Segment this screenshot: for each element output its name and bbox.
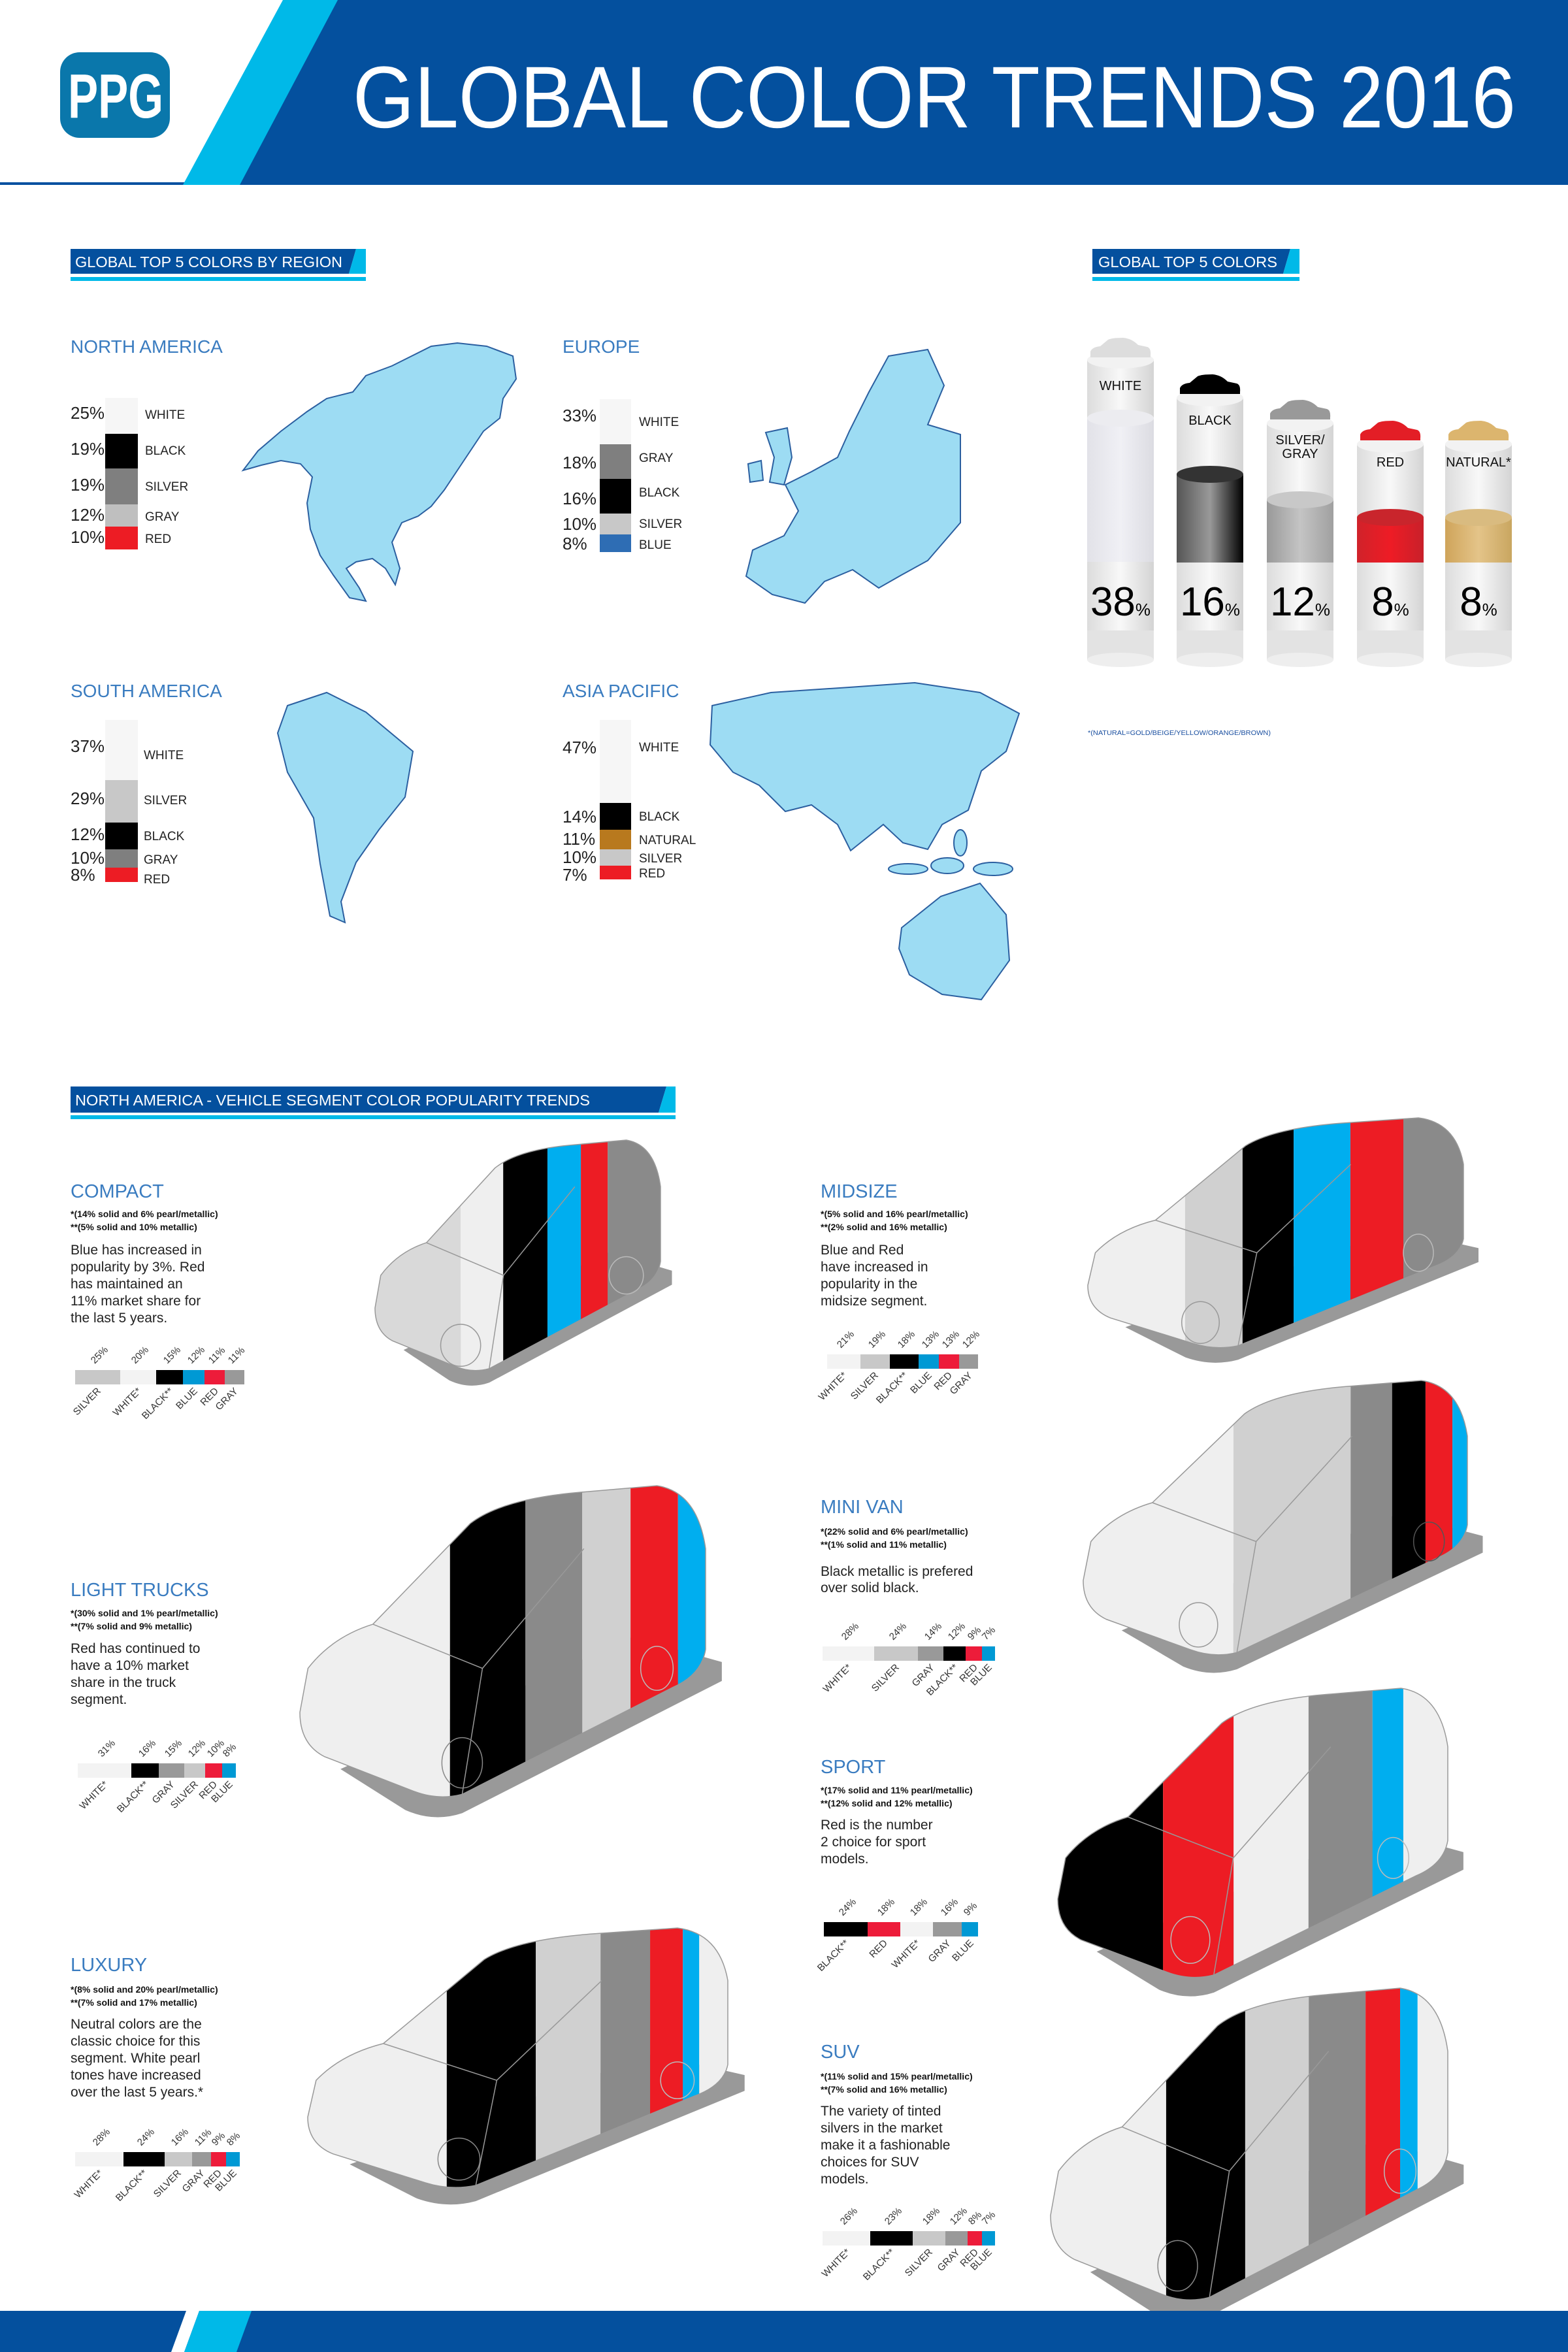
legend: north america: 25% xyxy=(71,403,105,423)
panel: north america: NORTH AMERICA xyxy=(71,336,223,357)
bar chart: light trucks: GRAY xyxy=(150,1779,177,1806)
panel: compact: the last 5 years. xyxy=(71,1311,167,1326)
panel: asia pacific: ASIA PACIFIC xyxy=(563,681,679,701)
legend: europe: 10% xyxy=(563,514,596,534)
legend: asia pacific: 47% xyxy=(563,738,596,757)
cylinder: silver/gray 12%: SILVER/ xyxy=(1275,433,1325,448)
map: north america xyxy=(243,343,516,601)
bar chart: luxury: 24% xyxy=(135,2127,157,2148)
panel: luxury: **(7% solid and 17% metallic) xyxy=(71,1997,197,2008)
bar chart: luxury: 11% xyxy=(193,2127,214,2148)
section heading: global top 5 colors by region xyxy=(71,249,366,281)
panel: luxury: LUXURY xyxy=(71,1955,147,1976)
legend: south america: GRAY xyxy=(144,853,178,867)
panel: midsize: popularity in the xyxy=(821,1277,917,1292)
bar chart: suv: 26% xyxy=(838,2206,860,2227)
panel: midsize: midsize segment. xyxy=(821,1294,927,1309)
panel: mini van: *(22% solid and 6% pearl/metallic) xyxy=(821,1526,968,1537)
bar chart: mini van: 24% xyxy=(887,1621,909,1642)
panel: sport: 2 choice for sport xyxy=(821,1835,926,1850)
bar chart: sport: RED xyxy=(867,1938,890,1960)
panel: mini van xyxy=(821,1497,998,1698)
legend: europe: SILVER xyxy=(639,517,682,531)
bar chart: light trucks: 12% xyxy=(186,1738,208,1759)
bar chart: mini van: 28% xyxy=(840,1621,861,1642)
bar chart: suv: BLUE xyxy=(968,2247,994,2273)
panel: europe: EUROPE xyxy=(563,336,640,357)
bar chart: compact xyxy=(71,1345,247,1422)
panel: south america: SOUTH AMERICA xyxy=(71,681,222,701)
bar chart: luxury: BLACK** xyxy=(114,2168,150,2204)
cylinder: silver/gray 12% xyxy=(1267,400,1333,667)
bar chart: midsize: SILVER xyxy=(849,1370,881,1402)
bar chart: suv: WHITE* xyxy=(820,2247,853,2279)
map: asia pacific xyxy=(710,683,1019,1000)
panel: light trucks: *(30% solid and 1% pearl/metallic) xyxy=(71,1608,218,1618)
panel: midsize xyxy=(817,1181,982,1406)
bar chart: light trucks: 10% xyxy=(205,1738,227,1759)
chart: global top 5 colors cylinders xyxy=(1087,338,1512,667)
panel: suv: make it a fashionable xyxy=(821,2138,950,2153)
panel: sport: Red is the number xyxy=(821,1818,933,1833)
panel: suv: **(7% solid and 16% metallic) xyxy=(821,2084,947,2095)
bar chart: luxury: WHITE* xyxy=(73,2168,105,2200)
car: suv xyxy=(1051,1988,1463,2321)
bar chart: mini van: 14% xyxy=(923,1621,944,1642)
cylinder: black 16% xyxy=(1177,374,1243,667)
panel: light trucks xyxy=(71,1580,238,1815)
panel: midsize: Blue and Red xyxy=(821,1243,904,1258)
legend: north america: 12% xyxy=(71,505,105,525)
panel: compact: popularity by 3%. Red xyxy=(71,1260,204,1275)
bar chart: compact: 11% xyxy=(226,1345,247,1366)
panel: midsize: **(2% solid and 16% metallic) xyxy=(821,1222,947,1232)
bar chart: midsize: 19% xyxy=(866,1329,888,1350)
panel: compact xyxy=(71,1181,247,1422)
legend: north america: 19% xyxy=(71,475,105,495)
bar chart: mini van: WHITE* xyxy=(821,1662,854,1695)
bar chart: compact: 25% xyxy=(89,1345,110,1366)
bar chart: compact: 20% xyxy=(129,1345,151,1366)
panel: suv: choices for SUV xyxy=(821,2155,919,2170)
bar chart: luxury: GRAY xyxy=(180,2168,207,2195)
legend: south america: 8% xyxy=(71,865,95,885)
section heading: global top 5 colors: GLOBAL TOP 5 COLORS xyxy=(1098,253,1277,270)
cylinder: red 8%: 8% xyxy=(1371,580,1409,625)
panel: luxury: segment. White pearl xyxy=(71,2051,200,2066)
bar chart: luxury: 28% xyxy=(91,2127,112,2148)
panel: suv: *(11% solid and 15% pearl/metallic) xyxy=(821,2071,973,2082)
panel: asia pacific xyxy=(563,681,1019,1000)
panel: mini van: over solid black. xyxy=(821,1580,919,1595)
bar chart: sport: BLUE xyxy=(950,1938,976,1964)
section heading: global top 5 colors xyxy=(1092,249,1299,281)
car: luxury xyxy=(308,1928,745,2204)
bar chart: sport: 16% xyxy=(939,1897,960,1918)
bar chart: luxury: SILVER xyxy=(152,2168,184,2200)
legend: south america xyxy=(71,720,187,887)
legend: europe: BLACK xyxy=(639,486,680,500)
bar chart: suv: GRAY xyxy=(936,2247,962,2274)
panel: luxury xyxy=(71,1955,242,2204)
panel: luxury: over the last 5 years.* xyxy=(71,2085,203,2100)
bar chart: suv xyxy=(820,2206,998,2283)
legend: asia pacific: 14% xyxy=(563,807,596,826)
panel: light trucks: **(7% solid and 9% metallic) xyxy=(71,1621,192,1631)
panel: mini van: MINI VAN xyxy=(821,1497,904,1518)
bar chart: light trucks: BLACK** xyxy=(115,1779,151,1815)
cylinder: black 16%: 16% xyxy=(1180,580,1240,625)
panel: suv: SUV xyxy=(821,2042,860,2063)
panel: sport: **(12% solid and 12% metallic) xyxy=(821,1798,953,1808)
bar chart: midsize: BLACK** xyxy=(874,1370,910,1406)
legend: asia pacific: RED xyxy=(639,867,665,881)
bar chart: compact: BLUE xyxy=(174,1386,200,1412)
legend: asia pacific: BLACK xyxy=(639,810,680,824)
bar chart: compact: GRAY xyxy=(214,1386,240,1413)
section heading: vehicle segment trends: NORTH AMERICA - VEHICLE SEGMENT COLOR POPULARITY TRENDS xyxy=(75,1092,590,1109)
bar chart: light trucks: 8% xyxy=(221,1741,238,1759)
bar chart: midsize: RED xyxy=(932,1370,955,1392)
cylinder: silver/gray 12%: GRAY xyxy=(1282,447,1318,461)
panel: light trucks: Red has continued to xyxy=(71,1641,200,1656)
bar chart: mini van: BLUE xyxy=(968,1662,994,1688)
panel: sport: *(17% solid and 11% pearl/metallic) xyxy=(821,1785,973,1795)
panel: luxury: classic choice for this xyxy=(71,2034,200,2049)
cylinder: red 8%: RED xyxy=(1377,455,1404,470)
bar chart: sport: WHITE* xyxy=(890,1938,923,1970)
panel: suv: models. xyxy=(821,2172,869,2187)
bar chart: sport: BLACK** xyxy=(815,1938,851,1974)
bar chart: sport: 18% xyxy=(875,1897,897,1918)
panel: light trucks: share in the truck xyxy=(71,1675,176,1690)
bar chart: mini van: RED xyxy=(957,1662,980,1684)
section heading: global top 5 colors by region: GLOBAL TOP 5 COLORS BY REGION xyxy=(75,253,342,270)
bar chart: compact: WHITE* xyxy=(111,1386,144,1418)
bar chart: midsize: 21% xyxy=(835,1329,857,1350)
bar chart: luxury xyxy=(73,2127,242,2204)
legend: asia pacific: 10% xyxy=(563,847,596,867)
panel: south america xyxy=(71,681,413,923)
bar chart: midsize: 12% xyxy=(960,1329,982,1350)
car: mini van xyxy=(1083,1380,1483,1673)
legend: asia pacific: SILVER xyxy=(639,852,682,866)
bar chart: sport: 18% xyxy=(908,1897,930,1918)
cylinder: black 16%: BLACK xyxy=(1188,414,1232,428)
bar chart: light trucks: 16% xyxy=(137,1738,158,1759)
panel: light trucks: LIGHT TRUCKS xyxy=(71,1580,209,1601)
bar chart: compact: BLACK** xyxy=(140,1386,176,1422)
legend: south america: 37% xyxy=(71,736,105,756)
cylinder: white 38%: WHITE xyxy=(1100,379,1141,393)
panel: compact: 11% market share for xyxy=(71,1294,201,1309)
legend: europe: 33% xyxy=(563,406,596,425)
cylinder: natural 8% xyxy=(1445,421,1512,667)
logo: PPG xyxy=(60,52,170,138)
cylinder: red 8% xyxy=(1357,421,1424,667)
section heading: vehicle segment trends xyxy=(71,1086,676,1119)
panel: compact: has maintained an xyxy=(71,1277,183,1292)
bar chart: light trucks: BLUE xyxy=(209,1779,235,1805)
bar chart: suv: 23% xyxy=(883,2206,904,2227)
bar chart: sport: 9% xyxy=(962,1900,979,1918)
legend: europe: 8% xyxy=(563,534,587,553)
bar chart: mini van: 12% xyxy=(946,1621,968,1642)
bar chart: mini van: SILVER xyxy=(870,1662,902,1694)
bar chart: suv: 18% xyxy=(921,2206,942,2227)
car: compact xyxy=(375,1140,672,1386)
bar chart: compact: SILVER xyxy=(71,1386,103,1418)
bar chart: mini van: 7% xyxy=(980,1624,998,1642)
map: europe xyxy=(746,350,960,603)
legend: asia pacific xyxy=(563,720,696,885)
bar chart: compact: 11% xyxy=(206,1345,227,1366)
bar chart: midsize: 13% xyxy=(940,1329,962,1350)
bar chart: mini van xyxy=(821,1621,998,1698)
legend: south america: WHITE xyxy=(144,749,184,762)
legend: europe: 18% xyxy=(563,453,596,472)
legend: south america: 29% xyxy=(71,789,105,808)
panel: midsize: *(5% solid and 16% pearl/metallic) xyxy=(821,1209,968,1219)
panel: luxury: *(8% solid and 20% pearl/metallic) xyxy=(71,1984,218,1995)
panel: suv: The variety of tinted xyxy=(821,2104,941,2119)
legend: south america: 10% xyxy=(71,848,105,868)
panel: suv xyxy=(820,2042,998,2283)
panel: mini van: **(1% solid and 11% metallic) xyxy=(821,1539,947,1550)
legend: europe xyxy=(563,399,682,553)
bar chart: midsize: 18% xyxy=(896,1329,917,1350)
bar chart: luxury: BLUE xyxy=(213,2168,239,2194)
panel: sport xyxy=(815,1757,979,1974)
cylinder: white 38%: 38% xyxy=(1090,580,1151,625)
panel: suv: silvers in the market xyxy=(821,2121,943,2136)
bar chart: compact: 15% xyxy=(161,1345,183,1366)
bar chart: suv: 7% xyxy=(980,2209,998,2227)
car: midsize xyxy=(1088,1118,1478,1363)
cylinder: silver/gray 12%: 12% xyxy=(1270,580,1330,625)
bar chart: midsize xyxy=(817,1329,982,1406)
panel: light trucks: segment. xyxy=(71,1692,127,1707)
bar chart: light trucks: 31% xyxy=(96,1738,118,1759)
panel: midsize: have increased in xyxy=(821,1260,928,1275)
legend: asia pacific: 11% xyxy=(563,829,595,849)
panel: mini van: Black metallic is prefered xyxy=(821,1564,973,1579)
legend: europe: WHITE xyxy=(639,416,679,429)
legend: north america: RED xyxy=(145,532,171,546)
legend: asia pacific: 7% xyxy=(563,865,587,885)
bar chart: suv: 12% xyxy=(948,2206,970,2227)
legend: europe: 16% xyxy=(563,489,596,508)
panel: europe xyxy=(563,336,960,603)
bar chart: luxury: 16% xyxy=(169,2127,191,2148)
panel: compact: **(5% solid and 10% metallic) xyxy=(71,1222,197,1232)
bar chart: luxury: 8% xyxy=(225,2130,242,2148)
legend: north america: WHITE xyxy=(145,408,185,422)
panel: sport: models. xyxy=(821,1852,869,1867)
bar chart: sport: 24% xyxy=(837,1897,858,1918)
panel: compact: COMPACT xyxy=(71,1181,164,1202)
cylinder: white 38% xyxy=(1087,338,1154,667)
bar chart: mini van: GRAY xyxy=(910,1662,937,1689)
panel: midsize: MIDSIZE xyxy=(821,1181,898,1202)
legend: north america xyxy=(71,398,188,549)
legend: asia pacific: NATURAL xyxy=(639,834,696,847)
bar chart: sport xyxy=(815,1897,979,1974)
map: south america xyxy=(278,693,413,923)
bar chart: suv: RED xyxy=(958,2247,981,2269)
bar chart: mini van: BLACK** xyxy=(924,1662,960,1698)
panel: sport: SPORT xyxy=(821,1757,886,1778)
legend: asia pacific: WHITE xyxy=(639,741,679,755)
bar chart: suv: SILVER xyxy=(903,2247,935,2279)
legend: north america: BLACK xyxy=(145,444,186,458)
legend: north america: SILVER xyxy=(145,480,188,494)
bar chart: light trucks: RED xyxy=(197,1779,220,1801)
logo: PPG: PPG xyxy=(68,61,163,131)
bar chart: compact: 12% xyxy=(186,1345,207,1366)
bar chart: midsize: GRAY xyxy=(948,1370,975,1397)
panel: compact: Blue has increased in xyxy=(71,1243,202,1258)
header banner xyxy=(0,0,1568,185)
bar chart: luxury: 9% xyxy=(210,2130,227,2148)
bar chart: midsize: 13% xyxy=(920,1329,941,1350)
bar chart: compact: RED xyxy=(198,1386,221,1408)
panel: north america xyxy=(71,336,516,601)
legend: europe: GRAY xyxy=(639,451,674,465)
footnote: natural definition: *(NATURAL=GOLD/BEIGE/YELLOW/ORANGE/BROWN) xyxy=(1088,730,1271,737)
bar chart: mini van: 9% xyxy=(966,1624,983,1642)
legend: south america: SILVER xyxy=(144,794,187,808)
panel: compact: *(14% solid and 6% pearl/metallic) xyxy=(71,1209,218,1219)
bar chart: light trucks: 15% xyxy=(163,1738,184,1759)
bar chart: light trucks: WHITE* xyxy=(78,1779,110,1812)
car: sport xyxy=(1058,1688,1463,1997)
car: light truck xyxy=(300,1486,722,1817)
panel: luxury: tones have increased xyxy=(71,2068,201,2083)
bar chart: light trucks xyxy=(78,1738,238,1815)
legend: north america: 10% xyxy=(71,527,105,547)
cylinder: natural 8%: 8% xyxy=(1460,580,1497,625)
legend: south america: 12% xyxy=(71,825,105,844)
bar chart: sport: GRAY xyxy=(926,1938,953,1965)
bar chart: luxury: RED xyxy=(201,2168,224,2190)
legend: europe: BLUE xyxy=(639,538,672,552)
bar chart: midsize: BLUE xyxy=(908,1370,934,1396)
panel: light trucks: have a 10% market xyxy=(71,1658,189,1673)
bar chart: suv: 8% xyxy=(966,2209,984,2227)
cylinder: natural 8%: NATURAL* xyxy=(1446,455,1511,470)
bar chart: suv: BLACK** xyxy=(861,2247,897,2283)
panel: luxury: Neutral colors are the xyxy=(71,2017,202,2032)
legend: north america: 19% xyxy=(71,439,105,459)
legend: south america: RED xyxy=(144,873,170,887)
bar chart: midsize: WHITE* xyxy=(817,1370,849,1403)
legend: south america: BLACK xyxy=(144,830,185,843)
legend: north america: GRAY xyxy=(145,510,180,524)
bar chart: light trucks: SILVER xyxy=(169,1779,201,1811)
footer band xyxy=(0,2311,1568,2352)
